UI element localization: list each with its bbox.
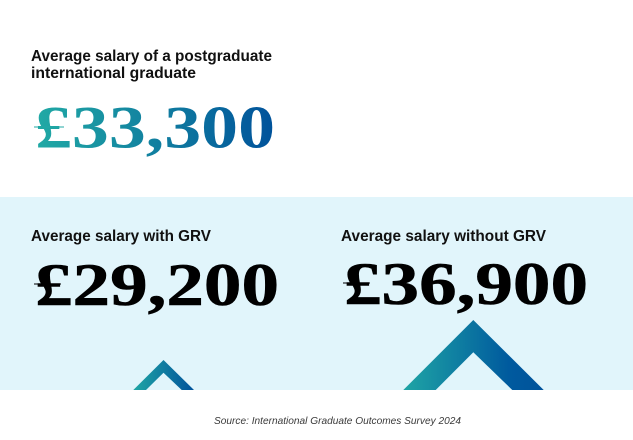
figure: £36,900: £36,900 [344, 251, 588, 317]
heading: average salary without GRV: Average salary without GRV [341, 228, 546, 245]
heading: average salary with GRV: Average salary with GRV [31, 228, 211, 245]
figure: £29,200: £29,200 [35, 252, 279, 318]
panel: salary comparison background [0, 197, 633, 390]
icon: large chevron without GRV [403, 320, 544, 390]
heading: postgraduate average salary: international graduate [31, 65, 196, 82]
heading: postgraduate average salary: Average salary of a postgraduate [31, 48, 272, 65]
figure: £33,300: £33,300 [35, 94, 275, 160]
source note: Source: International Graduate Outcomes Survey 2024 [214, 415, 461, 427]
heading: postgraduate average salary [31, 48, 272, 82]
icon: small chevron with GRV [133, 360, 194, 390]
